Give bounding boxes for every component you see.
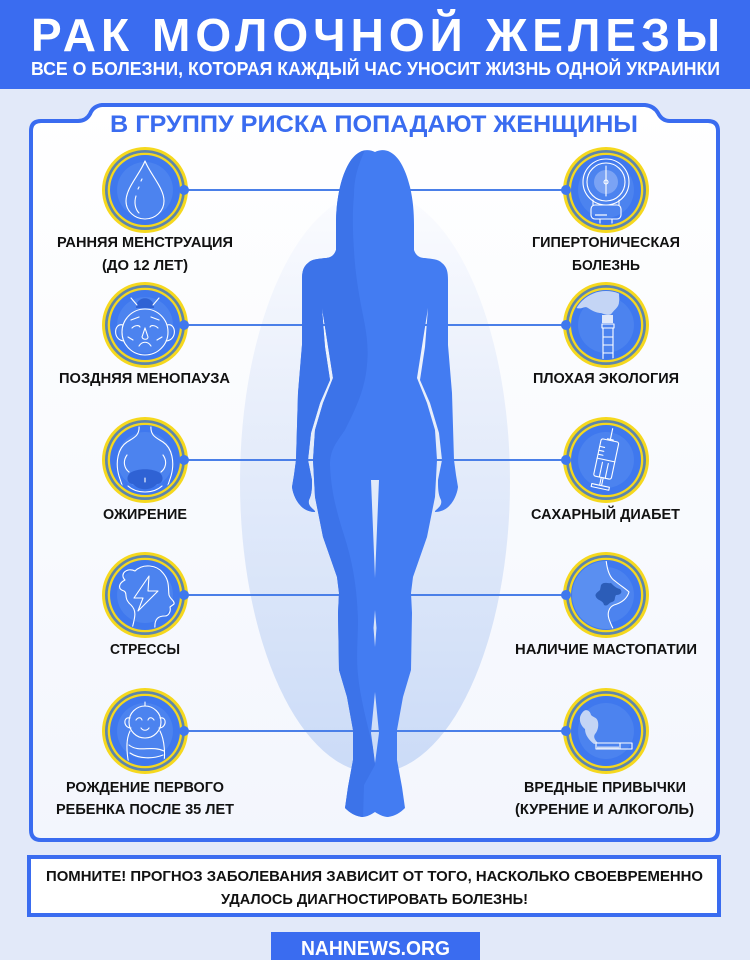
risk factor: obesity <box>102 417 189 523</box>
subtitle: ВСЕ О БОЛЕЗНИ, КОТОРАЯ КАЖДЫЙ ЧАС УНОСИТ ЖИЗНЬ ОДНОЙ УКРАИНКИ <box>31 58 720 79</box>
title: РАК МОЛОЧНОЙ ЖЕЛЕЗЫ <box>31 9 720 61</box>
header band <box>0 0 750 89</box>
background ellipse <box>240 191 510 773</box>
label: РАННЯЯ МЕНСТРУАЦИЯ <box>57 235 233 251</box>
icon: cigarette with smoke <box>563 688 649 774</box>
label: САХАРНЫЙ ДИАБЕТ <box>531 505 680 523</box>
connector dot <box>179 590 189 600</box>
connector dot <box>561 455 571 465</box>
risk factor: mastopathy <box>515 552 697 658</box>
label line 2: (КУРЕНИЕ И АЛКОГОЛЬ) <box>515 802 694 818</box>
risk factor: late menopause <box>59 282 231 387</box>
connector dot <box>561 185 571 195</box>
icon: head with lightning <box>102 552 188 638</box>
callout line 1: ПОМНИТЕ! ПРОГНОЗ ЗАБОЛЕВАНИЯ ЗАВИСИТ ОТ ТОГО, НАСКОЛЬКО СВОЕВРЕМЕННО <box>46 868 703 885</box>
connector dot <box>561 726 571 736</box>
risk factor: hypertension <box>532 147 680 274</box>
risk factor: bad habits <box>515 688 694 818</box>
label: ОЖИРЕНИЕ <box>103 507 187 523</box>
icon: blood pressure gauge <box>563 147 649 233</box>
icon: syringe <box>563 417 649 503</box>
label: ПОЗДНЯЯ МЕНОПАУЗА <box>59 371 231 387</box>
risk factor: diabetes <box>531 417 680 523</box>
callout: reminder <box>29 857 719 915</box>
risk factor: first child after 35 <box>56 688 234 818</box>
icon: breast with lesion <box>563 552 649 638</box>
icon: smokestack <box>563 282 649 368</box>
connector dot <box>179 320 189 330</box>
label: НАЛИЧИЕ МАСТОПАТИИ <box>515 642 697 658</box>
connector dot <box>561 320 571 330</box>
label line 2: РЕБЕНКА ПОСЛЕ 35 ЛЕТ <box>56 802 234 818</box>
risk factor: stress <box>102 552 189 658</box>
label: РОЖДЕНИЕ ПЕРВОГО <box>66 780 224 796</box>
footer source badge <box>271 932 480 960</box>
icon: baby <box>102 688 188 774</box>
label: СТРЕССЫ <box>110 642 180 658</box>
label: ВРЕДНЫЕ ПРИВЫЧКИ <box>524 780 686 796</box>
icon: torso <box>102 417 188 503</box>
icon: water drop <box>102 147 188 233</box>
label: ГИПЕРТОНИЧЕСКАЯ <box>532 235 680 251</box>
callout line 2: УДАЛОСЬ ДИАГНОСТИРОВАТЬ БОЛЕЗНЬ! <box>221 891 528 908</box>
connector dot <box>179 185 189 195</box>
footer source badge: NAHNEWS.ORG <box>301 938 450 960</box>
connector lines <box>185 190 566 731</box>
connector dot <box>179 455 189 465</box>
connector dot <box>179 726 189 736</box>
connector dot <box>561 590 571 600</box>
panel heading: В ГРУППУ РИСКА ПОПАДАЮТ ЖЕНЩИНЫ <box>110 111 638 138</box>
icon: elderly face <box>102 282 188 368</box>
label line 2: (ДО 12 ЛЕТ) <box>102 258 188 274</box>
risk factor: poor ecology <box>533 282 679 387</box>
female silhouette <box>290 140 458 820</box>
label line 2: БОЛЕЗНЬ <box>572 258 640 274</box>
label: ПЛОХАЯ ЭКОЛОГИЯ <box>533 371 679 387</box>
risk factor: early menstruation <box>57 147 233 274</box>
